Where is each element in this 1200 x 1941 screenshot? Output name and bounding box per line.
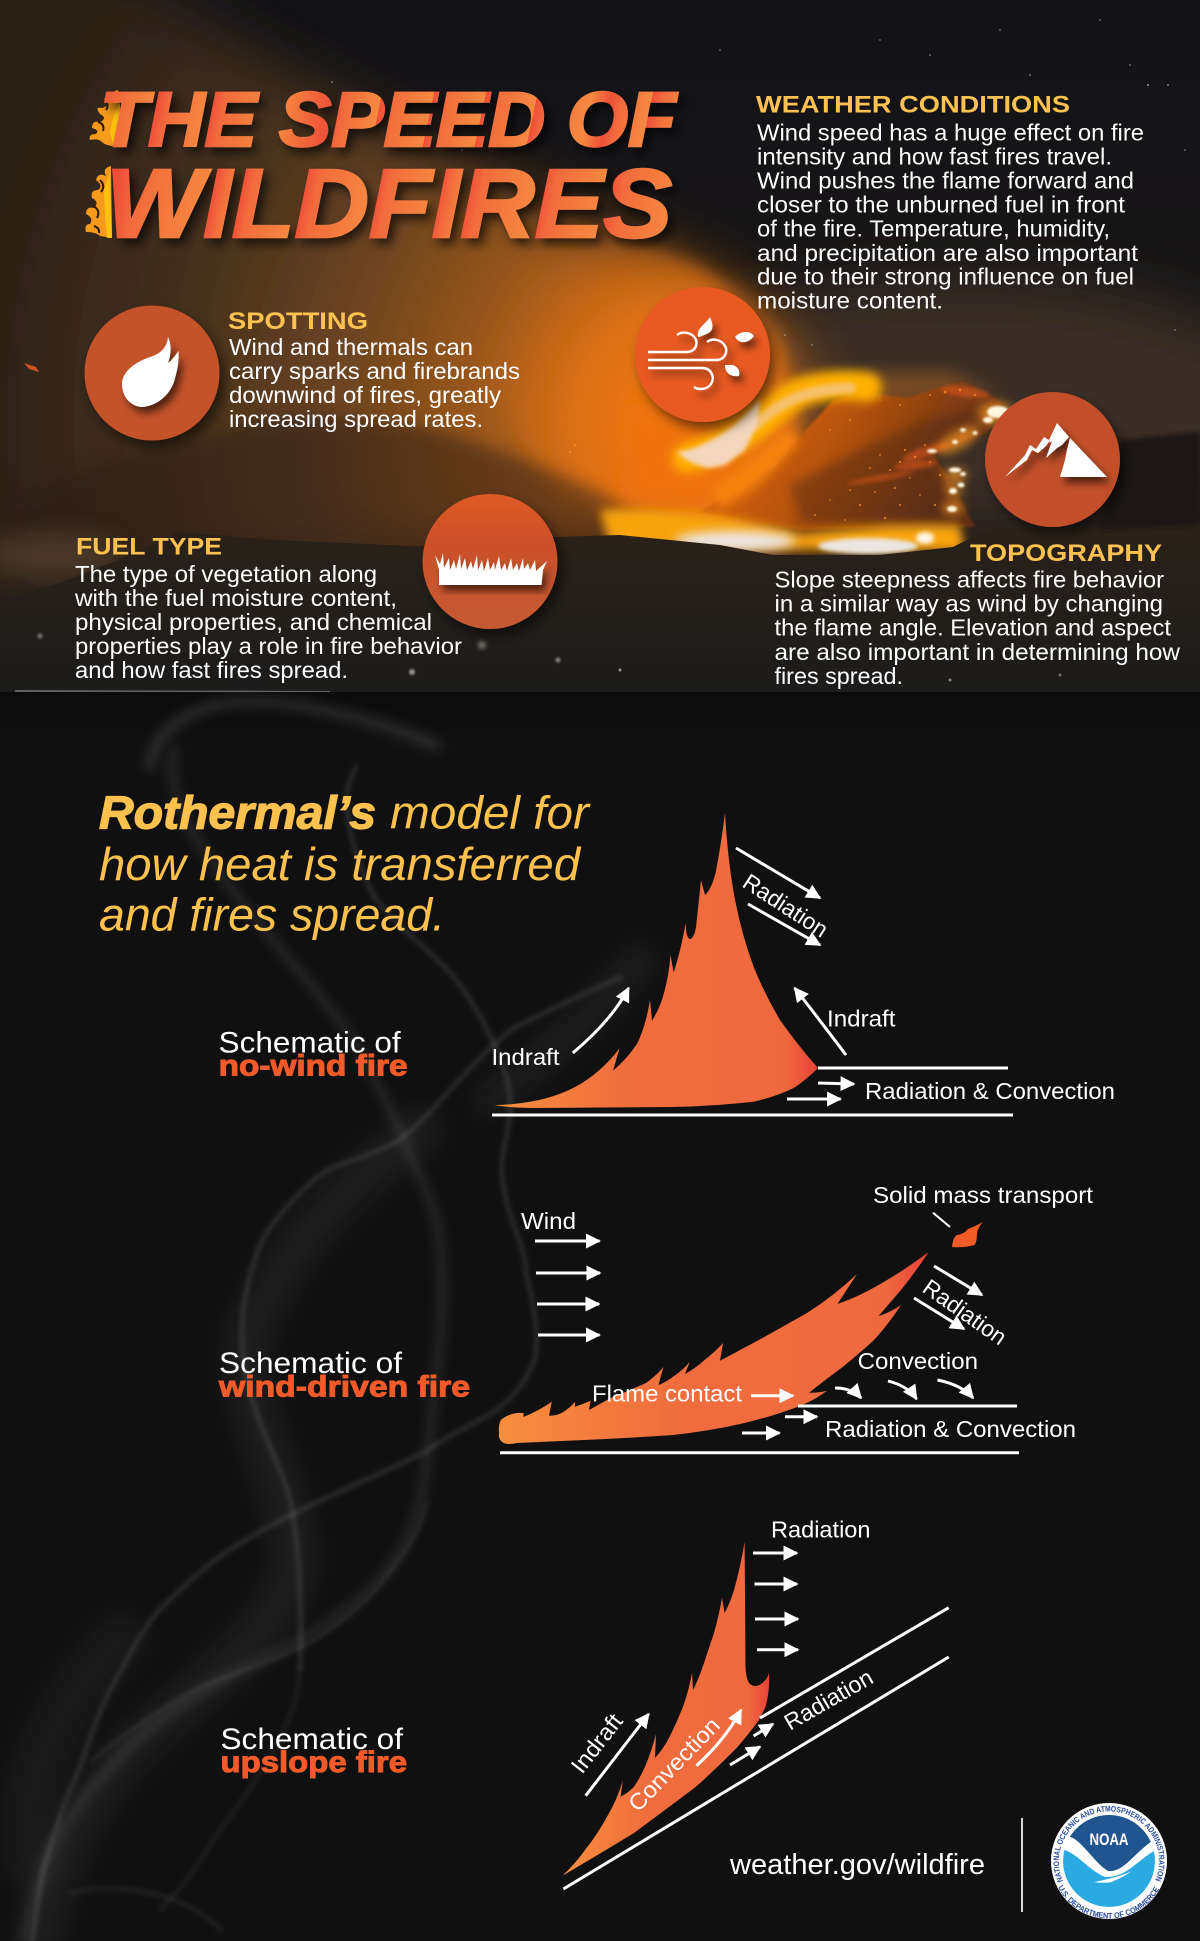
chart: no-wind fire schematic — [492, 813, 1115, 1115]
flame shape — [495, 813, 818, 1108]
text block: spotting: Wind and thermals can — [229, 334, 473, 360]
radiation arrows — [753, 1553, 798, 1650]
lava streaks — [846, 384, 989, 486]
text block: spotting — [229, 334, 520, 432]
right indraft label: Indraft — [827, 1006, 896, 1032]
small arrows — [818, 1083, 854, 1084]
solid mass transport label: Solid mass transport — [873, 1182, 1094, 1208]
label: schematic of wind-driven fire: Schematic of — [219, 1347, 403, 1380]
text block: weather conditions: moisture content. — [757, 288, 943, 314]
panel: spotting — [84, 306, 520, 440]
radiation arrows — [736, 848, 820, 898]
title — [86, 77, 678, 258]
text block: fuel type: properties play a role in fire behavior — [75, 633, 462, 659]
ground lines — [492, 1068, 1013, 1115]
text block: topography — [774, 567, 1180, 689]
convection arrows — [835, 1380, 973, 1399]
text block: weather conditions: Wind pushes the flame forward and — [757, 168, 1134, 194]
divider — [1021, 1818, 1023, 1912]
slope lines — [563, 1608, 949, 1889]
right indraft arrow — [795, 988, 846, 1055]
text block: topography: are also important in determining how — [774, 639, 1180, 665]
icon: grass — [422, 494, 558, 629]
icon: wind and leaves — [635, 287, 770, 422]
text block: weather conditions: and precipitation are also important — [757, 240, 1139, 266]
label: schematic of no-wind fire: no-wind fire — [219, 1050, 408, 1082]
indraft arrow — [586, 1714, 649, 1796]
text block: fuel type — [74, 561, 462, 683]
wind label: Wind — [521, 1208, 576, 1234]
text block: topography: the flame angle. Elevation and aspect — [774, 614, 1172, 640]
website url: weather.gov/wildfire — [729, 1849, 985, 1881]
text block: topography: in a similar way as wind by changing — [774, 590, 1163, 616]
heading: Rothermal's model — [99, 786, 591, 940]
text block: topography: fires spread. — [774, 663, 903, 689]
icon: NOAA logo: NOAA — [1090, 1831, 1129, 1849]
text block: weather conditions — [757, 120, 1144, 314]
far right mountains — [1100, 432, 1200, 530]
foreground mountains — [0, 520, 1200, 700]
heading: topography: TOPOGRAPHY — [970, 540, 1162, 567]
icon: NOAA logo: U.S. DEPARTMENT OF COMMERCE — [1058, 1884, 1160, 1918]
line of fire spots — [933, 402, 1014, 515]
ember — [952, 1222, 983, 1247]
stars — [331, 19, 1186, 346]
heading: Rothermal's model: Rothermal’s — [99, 786, 376, 838]
flame shape — [499, 1252, 929, 1444]
small arrows — [785, 1415, 817, 1418]
left indraft label: Indraft — [492, 1044, 560, 1070]
text block: spotting: increasing spread rates. — [229, 406, 483, 432]
convection arrow — [696, 1710, 741, 1766]
flame contact label: Flame contact — [592, 1381, 743, 1407]
text block: fuel type: The type of vegetation along — [75, 561, 377, 587]
background photo: wildfire at night — [0, 0, 1200, 750]
wind arrows — [535, 1241, 600, 1335]
heading: fuel type: FUEL TYPE — [76, 534, 222, 561]
indraft label: Indraft — [565, 1708, 628, 1778]
radiation arrows — [934, 1266, 982, 1295]
label: schematic of no-wind fire: Schematic of — [219, 1027, 401, 1060]
text block: fuel type: and how fast fires spread. — [75, 657, 348, 683]
flame shape — [562, 1542, 769, 1876]
icon: flame — [84, 306, 220, 440]
text block: spotting: downwind of fires, greatly — [229, 382, 502, 408]
panel: topography — [774, 392, 1180, 689]
radiation and convection label: Radiation & Convection — [825, 1416, 1076, 1442]
text block: spotting: carry sparks and firebrands — [229, 358, 520, 384]
heading: Rothermal's model: how heat is transferred — [99, 838, 581, 890]
text block: fuel type: with the fuel moisture content, — [74, 585, 397, 611]
icon: mountain — [985, 392, 1120, 527]
label: schematic of wind-driven fire: wind-driven fire — [218, 1370, 470, 1404]
radiation label: Radiation — [738, 868, 833, 942]
text block: weather conditions: Wind speed has a huge effect on fire — [757, 120, 1144, 146]
panel: weather conditions — [756, 92, 1144, 314]
text block: weather conditions: due to their strong influence on fuel — [757, 264, 1134, 290]
label: schematic of no-wind fire — [219, 1027, 408, 1082]
label: schematic of wind-driven fire — [218, 1347, 470, 1404]
convection label: Convection — [858, 1348, 978, 1374]
yellow flame band — [687, 385, 867, 458]
label: schematic of upslope fire: upslope fire — [220, 1746, 407, 1779]
small arrows — [754, 1724, 773, 1736]
white hot smoke — [677, 400, 760, 468]
title line 2: WILDFIRES — [106, 149, 672, 258]
label: schematic of upslope fire — [220, 1723, 407, 1779]
title flames — [86, 90, 120, 238]
radiation label: Radiation — [918, 1274, 1012, 1350]
fire lit ridge — [700, 382, 1003, 530]
chart: wind-driven fire schematic — [499, 1182, 1094, 1453]
icon: NOAA logo — [1051, 1803, 1167, 1919]
text block: weather conditions: of the fire. Temperature, humidity, — [757, 215, 1110, 241]
title line 1: THE SPEED OF — [100, 77, 678, 163]
text block: weather conditions: closer to the unburned fuel in front — [757, 191, 1126, 217]
icon: NOAA logo: NATIONAL OCEANIC AND ATMOSPHERIC ADMINISTRATION — [1053, 1806, 1164, 1883]
text block: fuel type: physical properties, and chemical — [75, 609, 432, 635]
chart: upslope fire schematic — [562, 1517, 949, 1889]
slope radiation label: Radiation — [780, 1664, 877, 1735]
glow band in the valley — [600, 509, 965, 552]
flame contact arrow — [751, 1394, 793, 1397]
heading: Rothermal's model: and fires spread. — [99, 888, 445, 940]
heading: weather conditions: WEATHER CONDITIONS — [756, 92, 1070, 118]
text block: weather conditions: intensity and how fast fires travel. — [757, 144, 1112, 170]
radiation label: Radiation — [771, 1517, 870, 1543]
heading: spotting: SPOTTING — [228, 308, 368, 335]
label: schematic of upslope fire: Schematic of — [220, 1723, 404, 1756]
panel: fuel type — [74, 494, 558, 683]
convection label: Convection — [623, 1712, 725, 1816]
text block: topography: Slope steepness affects fire behavior — [774, 567, 1164, 593]
town lights — [15, 634, 1062, 693]
left indraft arrow — [573, 988, 629, 1053]
ground lines — [500, 1406, 1019, 1453]
pointer line — [933, 1213, 950, 1227]
smoke wisps — [24, 702, 640, 1941]
radiation and convection label: Radiation & Convection — [865, 1078, 1115, 1104]
heading: Rothermal's model: model for — [390, 786, 591, 838]
